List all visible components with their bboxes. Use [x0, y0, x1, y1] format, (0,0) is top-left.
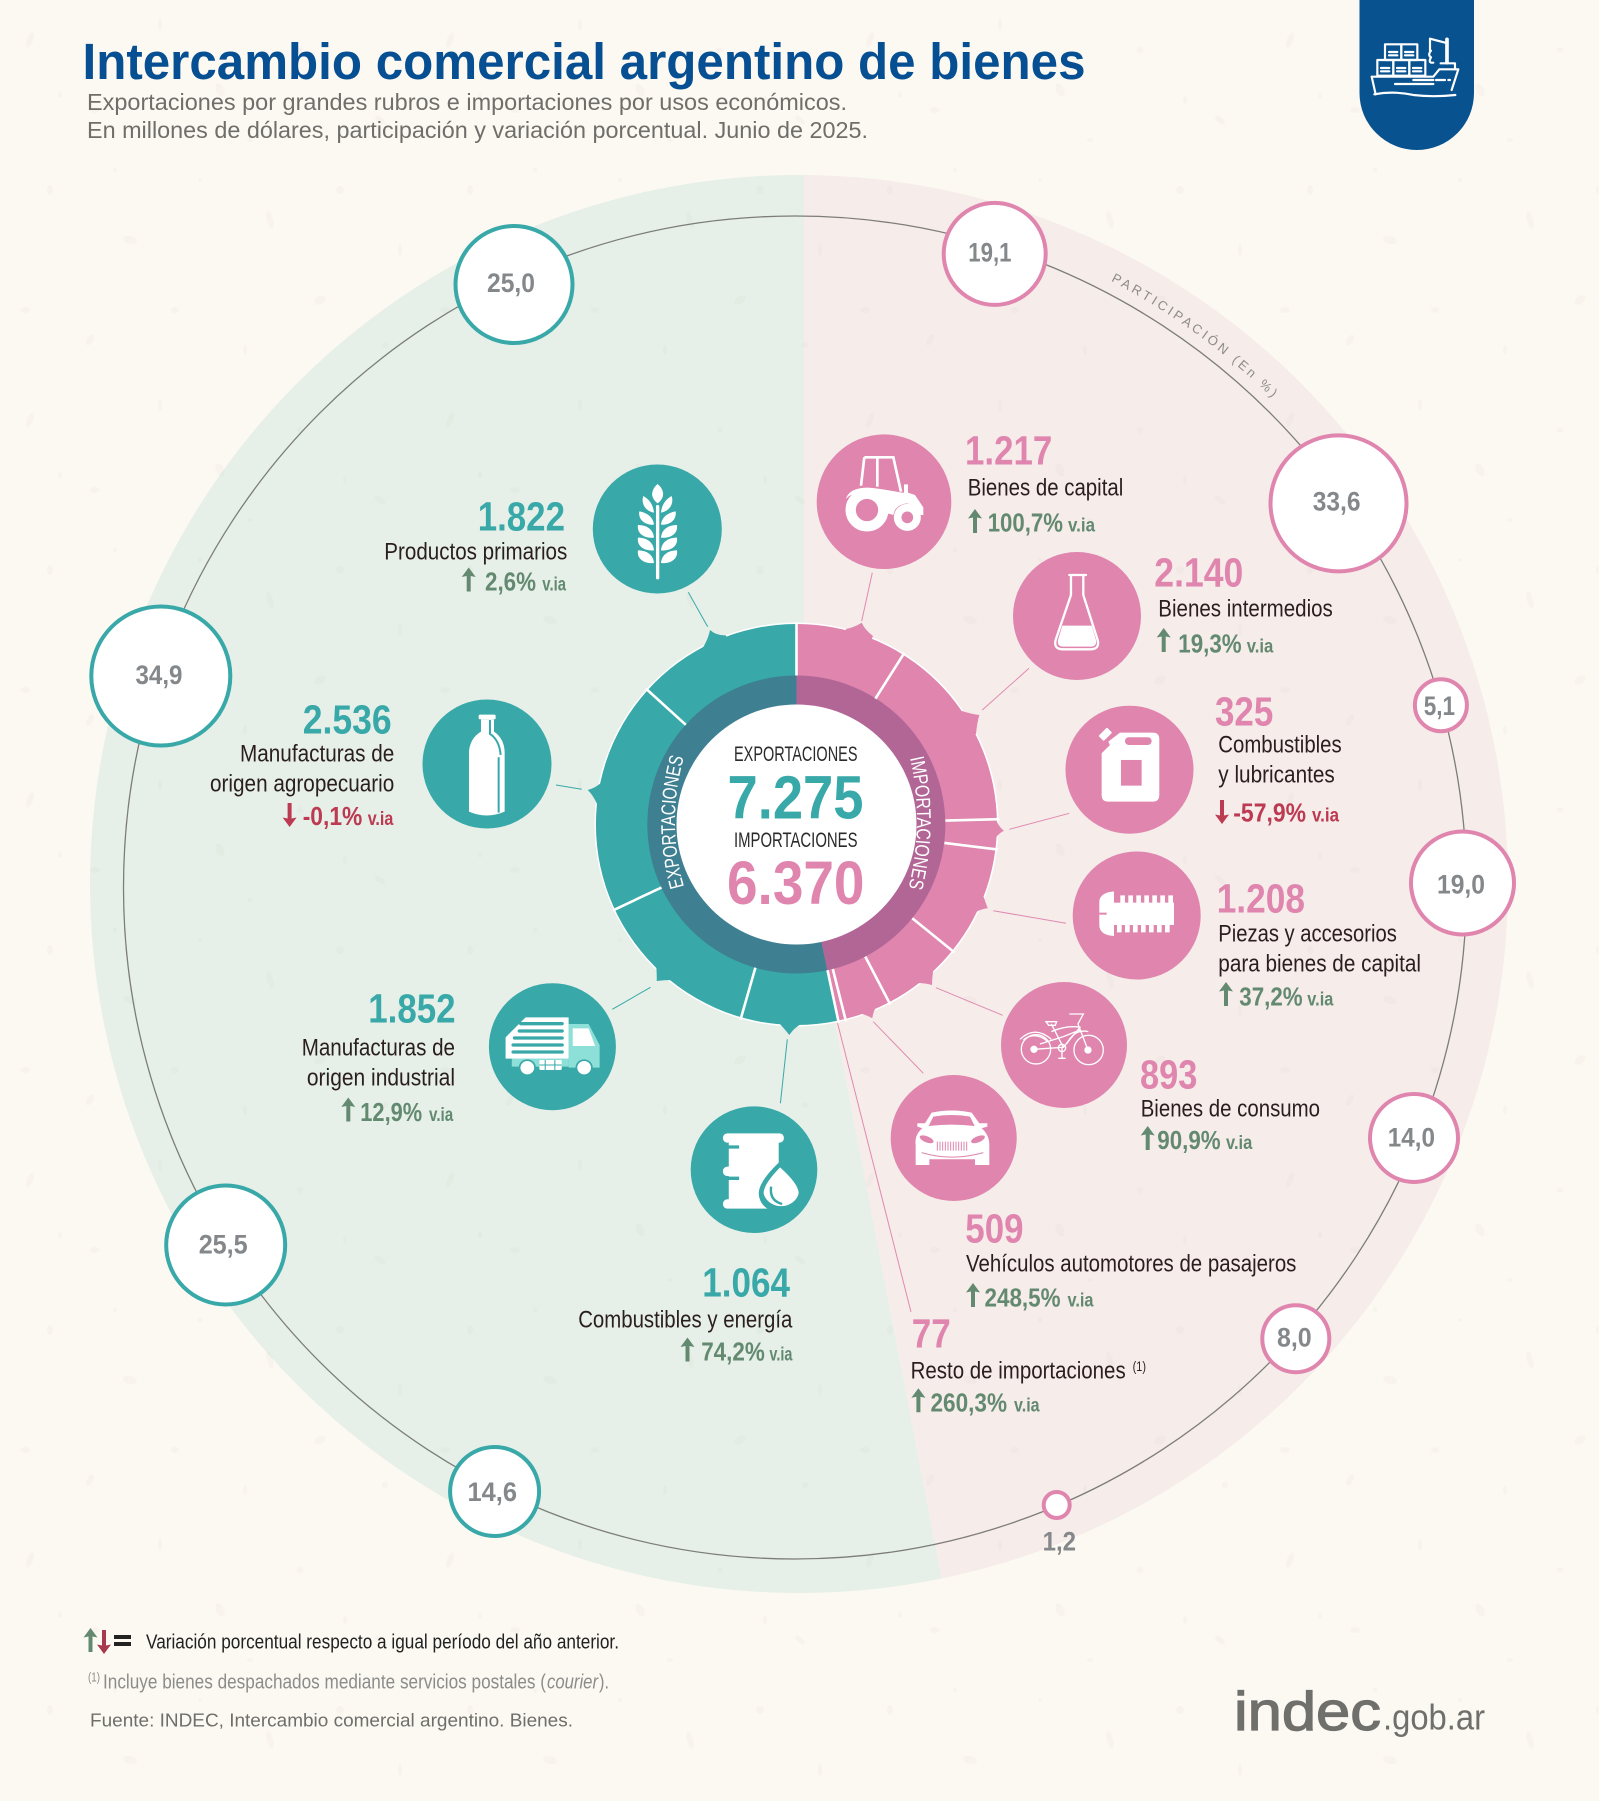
label: bienes de capital: 1.217: [965, 427, 1052, 473]
participation values: imports: 5,1: [1424, 691, 1455, 721]
label: resto de importaciones: 260,3%: [930, 1388, 1007, 1418]
logo: indec.gob.ar: [1234, 1680, 1485, 1742]
label: manufacturas de origen agropecuario: origen agropecuario: [210, 771, 394, 798]
title: Intercambio comercial argentino de bienes: [82, 33, 1086, 90]
label: bienes de consumo: 893: [1140, 1051, 1197, 1097]
label: bienes intermedios: 2.140: [1154, 550, 1243, 596]
label: manufacturas de origen industrial: [302, 985, 456, 1127]
legend: variation arrows: [84, 1628, 619, 1654]
label: manufacturas de origen agropecuario: -0,1%: [303, 801, 362, 831]
label: combustibles y energía: v.ia: [769, 1345, 793, 1366]
center totals: 7.275: [728, 764, 864, 832]
label: vehículos automotores de pasajeros: [965, 1205, 1296, 1313]
icon: bolt: [1073, 852, 1201, 980]
icon: jerrycan: [1066, 706, 1194, 834]
logo: indec.gob.ar: indec: [1234, 1680, 1381, 1742]
label: resto de importaciones: v.ia: [1014, 1396, 1040, 1417]
logo: indec.gob.ar: .gob.ar: [1383, 1696, 1485, 1738]
label: manufacturas de origen industrial: origen industrial: [307, 1065, 455, 1092]
icon: flask: [1013, 552, 1141, 680]
connector lines: exports: [556, 592, 787, 1103]
label: manufacturas de origen agropecuario: [210, 696, 394, 831]
label: resto de importaciones: [911, 1311, 1146, 1418]
label: bienes intermedios: 19,3%: [1178, 628, 1242, 658]
label: manufacturas de origen industrial: Manufacturas de: [302, 1035, 455, 1062]
legend: variation arrows: Variación porcentual respecto a igual período del año anterior.: [146, 1632, 619, 1654]
icon: bottle: [422, 700, 552, 828]
label: combustibles y lubricantes: -57,9%: [1233, 798, 1306, 828]
label: combustibles y lubricantes: Combustibles: [1218, 731, 1342, 758]
label: manufacturas de origen agropecuario: Manufacturas de: [240, 741, 394, 768]
label: vehículos automotores de pasajeros: 248,5%: [984, 1283, 1061, 1313]
label: bienes intermedios: [1154, 550, 1333, 658]
exports dark ring: [647, 675, 828, 973]
participation values: exports: 25,5: [199, 1230, 248, 1260]
participation values: imports: 1,2: [1043, 1527, 1076, 1557]
label: combustibles y lubricantes: [1215, 689, 1342, 828]
label: bienes de consumo: Bienes de consumo: [1141, 1096, 1320, 1123]
label: bienes de consumo: v.ia: [1226, 1133, 1253, 1154]
label: vehículos automotores de pasajeros: Vehículos automotores de pasajeros: [966, 1251, 1296, 1278]
imports background sector: [797, 175, 1508, 1578]
footnote: (1): [88, 1670, 100, 1685]
label: combustibles y energía: 1.064: [702, 1260, 790, 1306]
label: resto de importaciones: 77: [912, 1311, 951, 1357]
label: combustibles y energía: [578, 1260, 793, 1367]
icon: tractor: [817, 434, 951, 569]
label: combustibles y energía: 74,2%: [701, 1337, 765, 1367]
label: productos primarios: 1.822: [478, 494, 565, 540]
source: Fuente: INDEC, Intercambio comercial argentino. Bienes.: [90, 1711, 573, 1731]
participation ring label: PARTICIPACIÓN (En %): [1112, 274, 1276, 398]
label: bienes intermedios: Bienes intermedios: [1158, 596, 1333, 623]
central donut chart: [588, 622, 1004, 1035]
imports dark ring: [796, 676, 945, 970]
label: resto de importaciones: Resto de importaciones: [911, 1357, 1126, 1384]
footnote: ).: [599, 1671, 609, 1693]
participation values: imports: 33,6: [1313, 486, 1360, 516]
label: piezas y accesorios: para bienes de capital: [1218, 951, 1421, 978]
subtitle: [87, 89, 868, 143]
participation values: imports: 8,0: [1277, 1323, 1312, 1353]
label: bienes de capital: v.ia: [1068, 516, 1095, 537]
label: vehículos automotores de pasajeros: v.ia: [1068, 1291, 1094, 1312]
label: vehículos automotores de pasajeros: 509: [965, 1205, 1024, 1251]
label: bienes de consumo: 90,9%: [1157, 1125, 1221, 1155]
label: manufacturas de origen industrial: v.ia: [429, 1105, 454, 1126]
participation bubbles: exports: [91, 226, 573, 1536]
label: bienes de capital: 100,7%: [988, 508, 1063, 538]
imports ring segments: [796, 623, 1004, 1021]
participation ring line: [124, 216, 1466, 1559]
participation values: imports: [968, 237, 1485, 1557]
center totals: IMPORTACIONES: [734, 829, 858, 852]
label: bienes intermedios: v.ia: [1247, 636, 1274, 657]
icon: oil barrel: [691, 1106, 817, 1233]
ring label: importaciones: IMPORTACIONES: [910, 756, 931, 890]
exports background sector: [90, 175, 942, 1593]
icon: car: [891, 1075, 1017, 1201]
label: productos primarios: 2,6%: [485, 567, 536, 597]
participation values: imports: 14,0: [1388, 1123, 1435, 1153]
label: piezas y accesorios: 37,2%: [1239, 982, 1303, 1012]
footnote: courier: [547, 1671, 599, 1693]
participation values: exports: 34,9: [136, 660, 182, 690]
label: productos primarios: v.ia: [542, 575, 566, 596]
participation bubbles: imports: [944, 203, 1514, 1518]
label: piezas y accesorios: Piezas y accesorios: [1218, 921, 1397, 948]
center totals: EXPORTACIONES: [734, 743, 858, 766]
participation values: exports: 14,6: [468, 1477, 517, 1507]
label: bienes de capital: [965, 427, 1123, 538]
label: combustibles y lubricantes: v.ia: [1312, 806, 1339, 827]
participation values: exports: [136, 268, 535, 1507]
subtitle: En millones de dólares, participación y variación porcentual. Junio de 2025.: [87, 117, 868, 143]
label: bienes de capital: Bienes de capital: [968, 475, 1123, 502]
label: resto de importaciones: (1): [1133, 1358, 1146, 1374]
label: piezas y accesorios: v.ia: [1307, 990, 1334, 1011]
label: bienes de consumo: [1140, 1051, 1320, 1155]
icon: wheat: [593, 464, 722, 594]
participation values: imports: 19,0: [1437, 870, 1485, 900]
icon: ship tab: [1360, 0, 1474, 150]
subtitle: Exportaciones por grandes rubros e importaciones por usos económicos.: [87, 89, 847, 115]
icon: bicycle: [1001, 982, 1127, 1108]
participation values: imports: 19,1: [968, 237, 1012, 267]
label: piezas y accesorios: 1.208: [1217, 876, 1305, 922]
label: manufacturas de origen agropecuario: 2.536: [303, 696, 392, 742]
icon: truck: [489, 983, 616, 1110]
label: manufacturas de origen industrial: 1.852: [368, 985, 456, 1031]
label: piezas y accesorios: [1217, 876, 1421, 1012]
label: combustibles y lubricantes: 325: [1215, 689, 1273, 735]
exports ring segments: [588, 624, 838, 1035]
footnote: Incluye bienes despachados mediante servicios postales (: [103, 1671, 546, 1693]
label: productos primarios: [384, 494, 567, 597]
label: combustibles y lubricantes: y lubricantes: [1218, 762, 1335, 789]
label: combustibles y energía: Combustibles y energía: [578, 1307, 793, 1334]
center totals: 6.370: [727, 849, 864, 917]
participation values: exports: 25,0: [487, 268, 535, 298]
center totals: [727, 743, 864, 917]
label: productos primarios: Productos primarios: [384, 538, 567, 565]
connector lines: imports: [837, 573, 1069, 1312]
label: manufacturas de origen agropecuario: v.ia: [368, 809, 394, 830]
label: manufacturas de origen industrial: 12,9%: [360, 1097, 422, 1127]
ring label: exportaciones: EXPORTACIONES: [661, 756, 684, 889]
